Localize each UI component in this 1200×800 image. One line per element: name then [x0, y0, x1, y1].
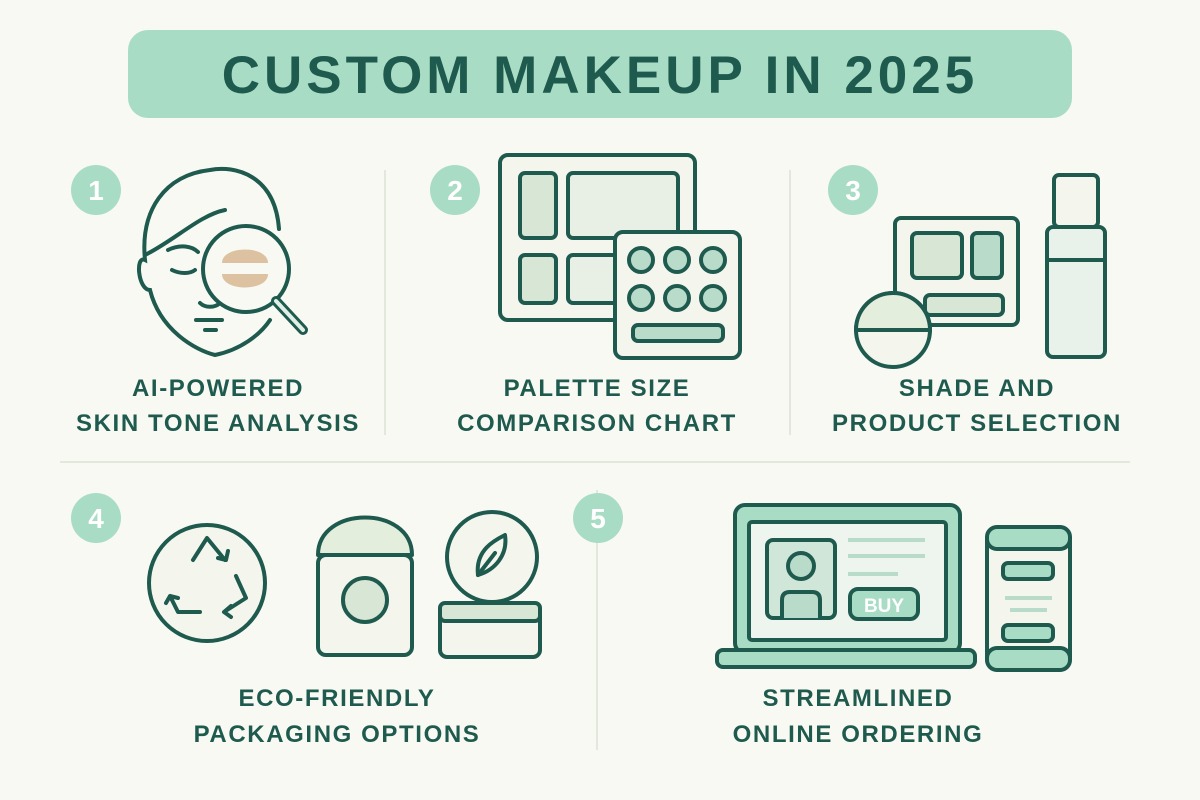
- badge 5: [573, 493, 623, 543]
- panel: online ordering: BUY: [864, 596, 904, 617]
- panel: eco-friendly packaging: [71, 493, 540, 748]
- badge 4: 4: [88, 503, 104, 534]
- label 5: [733, 685, 983, 748]
- title: CUSTOM MAKEUP IN 2025: [222, 46, 978, 105]
- label 1: [76, 375, 360, 437]
- panel: shade and product selection: [828, 165, 1122, 437]
- label 3: [832, 375, 1122, 437]
- icon: palette, compact, bottle: [856, 175, 1105, 367]
- badge 3: [828, 165, 878, 215]
- panel: palette size comparison: [430, 155, 740, 437]
- label 1: AI-POWERED: [132, 375, 304, 402]
- panel: skin tone analysis: [71, 165, 360, 437]
- label 4: PACKAGING OPTIONS: [194, 721, 480, 748]
- label 2: COMPARISON CHART: [457, 410, 737, 437]
- badge 2: [430, 165, 480, 215]
- badge 2: 2: [447, 175, 463, 206]
- label 2: [457, 375, 737, 437]
- label 3: PRODUCT SELECTION: [832, 410, 1122, 437]
- icon: laptop and phone: [717, 505, 1070, 670]
- icon: palettes: [500, 155, 740, 358]
- label 5: STREAMLINED: [763, 685, 953, 712]
- badge 5: 5: [590, 503, 606, 534]
- label 3: SHADE AND: [899, 375, 1055, 402]
- badge 3: 3: [845, 175, 861, 206]
- label 5: ONLINE ORDERING: [733, 721, 983, 748]
- label 4: ECO-FRIENDLY: [238, 685, 436, 712]
- label 4: [194, 685, 480, 748]
- icon: face with magnifier: [139, 169, 303, 355]
- title: [128, 30, 1072, 118]
- badge 1: 1: [88, 175, 104, 206]
- label 1: SKIN TONE ANALYSIS: [76, 410, 360, 437]
- badge 4: [71, 493, 121, 543]
- icon: recycle, jar, leaf container: [149, 512, 540, 657]
- label 2: PALETTE SIZE: [504, 375, 690, 402]
- panel: online ordering: [573, 493, 1070, 748]
- badge 1: [71, 165, 121, 215]
